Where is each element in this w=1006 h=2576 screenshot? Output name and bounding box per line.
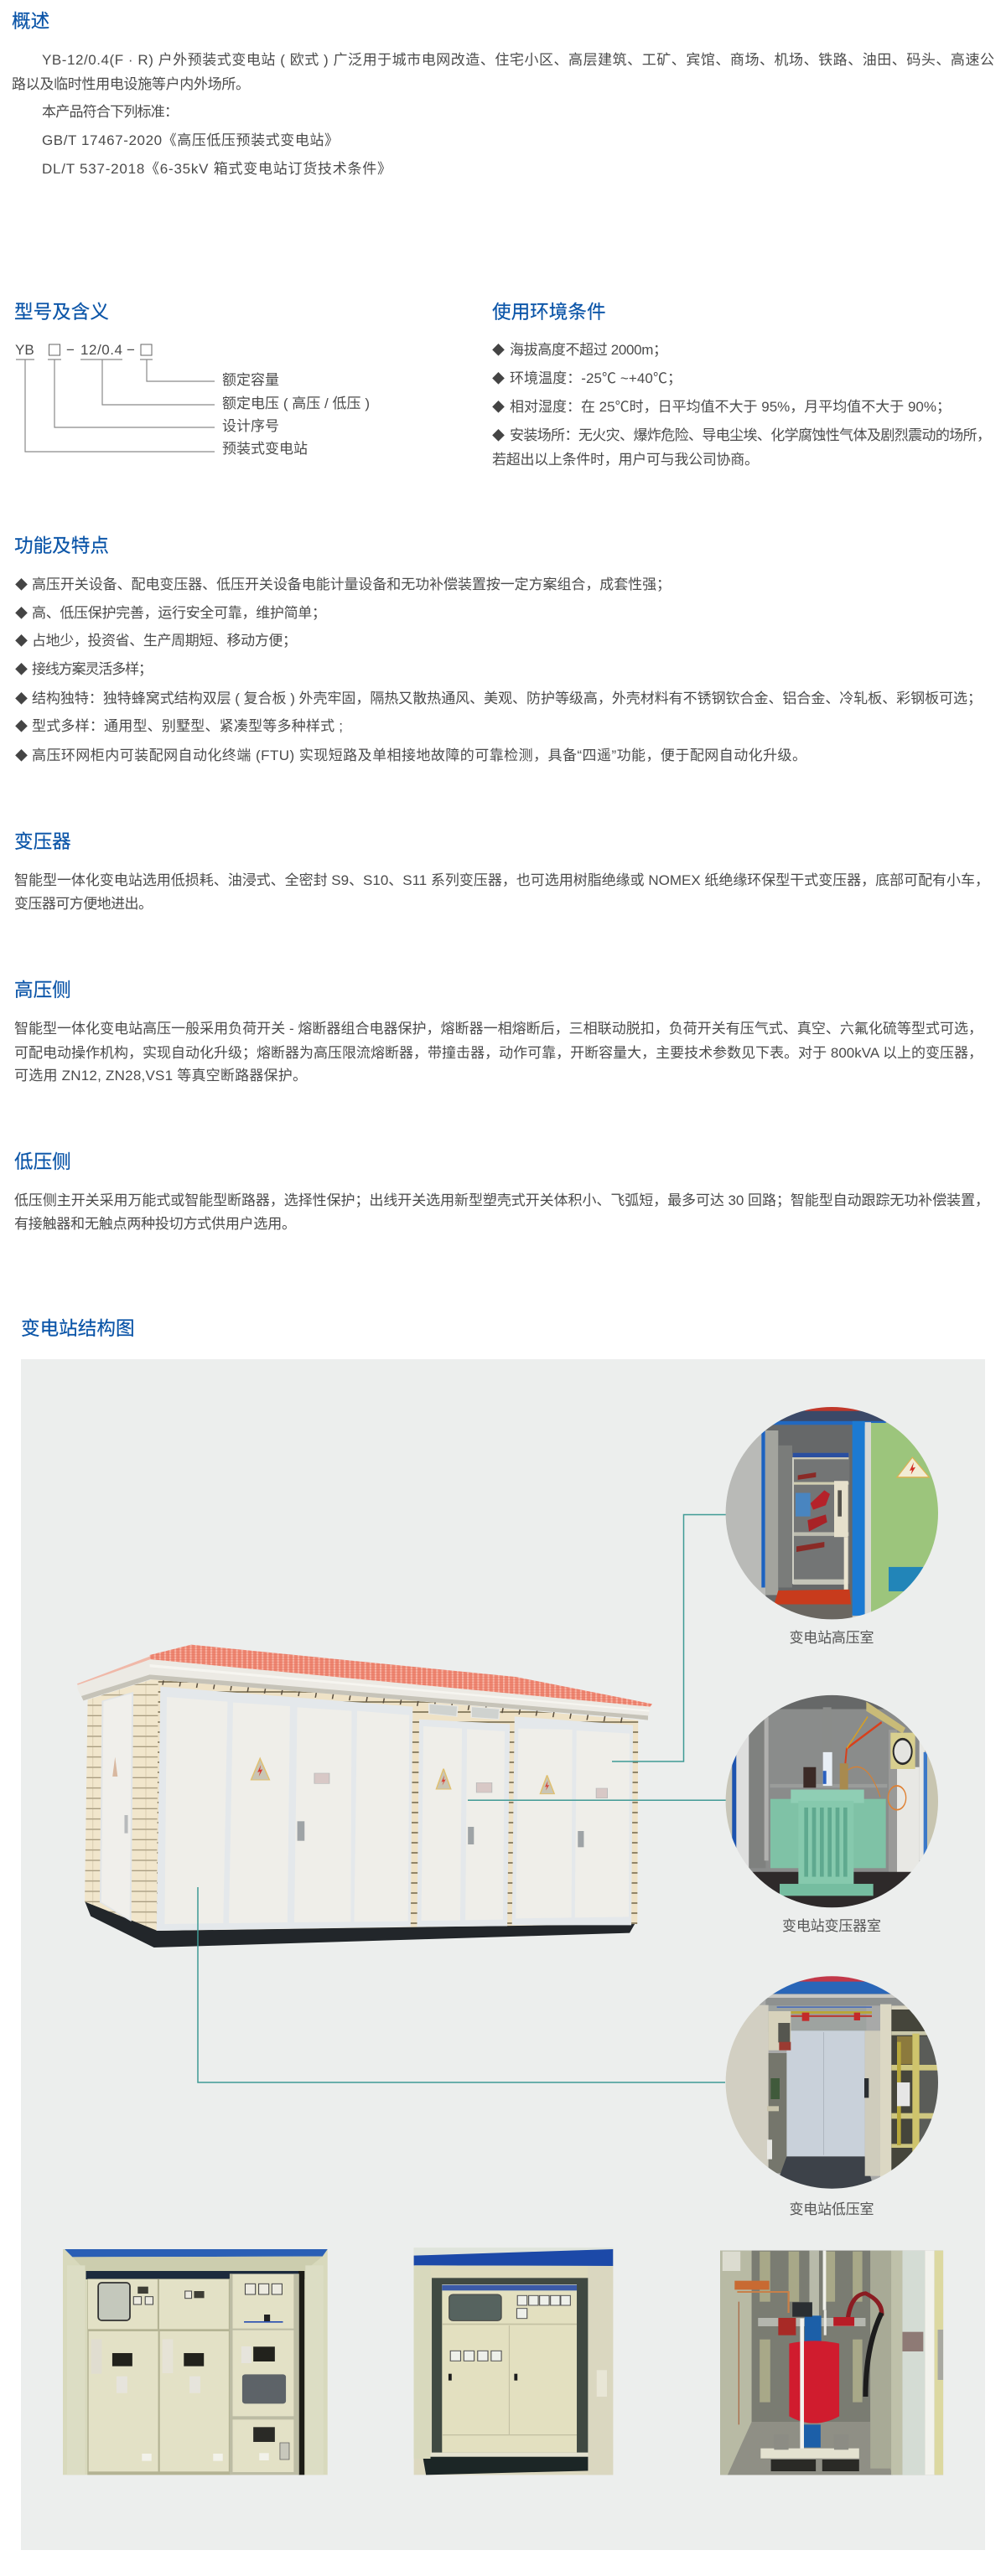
heading: low voltage side: 低压侧 [14, 1151, 71, 1172]
leader line: high voltage room [612, 1515, 726, 1761]
side door [101, 1693, 132, 1921]
transformer coil [805, 2315, 822, 2344]
label: rated capacity: 额定容量 [222, 372, 279, 388]
list: service conditions: ◆ [492, 344, 505, 358]
text block: transformer [14, 872, 989, 912]
list: functions and features: ◆ [15, 692, 28, 706]
list: service conditions: 若超出以上条件时，用户可与我公司协商。 [492, 452, 759, 468]
panel: structure diagram [21, 1359, 985, 2550]
list: functions and features: 结构独特：独特蜂窝式结构双层 ( 复合板 ) 外壳牢固，隔热又散热通风、美观、防护等级高，外壳材料有不锈钢钦合金、铝合金、冷轧板、彩钢板可选； [32, 691, 982, 706]
list: functions and features: ◆ [15, 634, 28, 649]
heading: substation structure diagram: 变电站结构图 [21, 1318, 135, 1339]
leader line: low voltage room [198, 1887, 725, 2082]
list: functions and features: 接线方案灵活多样； [32, 661, 153, 677]
model code: YB [15, 342, 34, 358]
list: functions and features: ◆ [15, 607, 28, 621]
label plates [314, 1773, 607, 1798]
list: service conditions: 环境温度：-25℃ ~+40℃； [510, 370, 682, 386]
list: functions and features: 型式多样：通用型、别墅型、紧凑型等多种样式 ; [32, 718, 343, 734]
text block: high voltage side [14, 1021, 983, 1084]
model code: − [127, 342, 135, 358]
heading: overview: 概述 [12, 11, 49, 32]
copper bus [737, 2292, 789, 2313]
front doors: section two [417, 1704, 510, 1927]
side wall [85, 1678, 158, 1931]
label: prefabricated substation: 预装式变电站 [222, 441, 308, 457]
text block: low voltage side: 低压侧主开关采用万能式或智能型断路器，选择性保护；出线开关选用新型塑壳式开关体积小、飞弧短，最多可达 30 回路；智能型自动跟踪无功补偿装置， [14, 1192, 989, 1208]
model code: 12/0.4 [80, 342, 122, 358]
text block: high voltage side: 智能型一体化变电站高压一般采用负荷开关 - 熔断器组合电器保护，熔断器一相熔断后，三相联动脱扣，负荷开关有压气式、真空、六氟化硫等型式可选， [14, 1021, 983, 1037]
text block: high voltage side: 可选用 ZN12, ZN28,VS1 等真空断路器保护。 [14, 1068, 307, 1084]
list: service conditions: ◆ [492, 372, 505, 386]
photo: low voltage cabinet [414, 2248, 613, 2475]
text block: high voltage side: 可配电动操作机构，实现自动化升级；熔断器为高压限流熔断器，带撞击器，动作可靠，开断容量大，主要技术参数见下表。对于 800kVA 以上的变压器， [14, 1045, 983, 1061]
text block: overview: DL/T 537-2018《6-35kV 箱式变电站订货技术条件》 [42, 161, 392, 177]
text block: overview: 路以及临时性用电设施等户内外场所。 [12, 76, 250, 92]
list: functions and features: ◆ [15, 749, 28, 763]
base [85, 1901, 636, 1948]
list: functions and features: 高压开关设备、配电变压器、低压开关设备电能计量设备和无功补偿装置按一定方案组合，成套性强； [32, 577, 671, 592]
photo: dry-type transformer [720, 2251, 943, 2475]
list: service conditions: 安装场所：无火灾、爆炸危险、导电尘埃、化学腐蚀性气体及剧烈震动的场所， [510, 427, 991, 443]
cornice [77, 1659, 651, 1720]
heading: model and meaning: 型号及含义 [14, 302, 109, 323]
text block: transformer: 智能型一体化变电站选用低损耗、油浸式、全密封 S9、S10、S11 系列变压器，也可选用树脂绝缘或 NOMEX 纸绝缘环保型干式变压器，底部可配有小车， [14, 872, 989, 888]
roof tiles [150, 1645, 652, 1707]
heading: functions and features: 功能及特点 [14, 535, 109, 556]
list: functions and features: 占地少，投资省、生产周期短、移动方便； [32, 633, 297, 649]
photo: switchgear cabinet [63, 2249, 328, 2475]
text block: low voltage side [14, 1192, 989, 1232]
cabinet panels [88, 2274, 293, 2472]
list: functions and features: ◆ [15, 663, 28, 677]
list: functions and features: 高压环网柜内可装配网自动化终端 (FTU) 实现短路及单相接地故障的可靠检测，具备“四遥”功能，便于配网自动化升级。 [32, 747, 806, 763]
label: design number: 设计序号 [222, 418, 279, 434]
model code [15, 342, 152, 358]
caption: low voltage room: 变电站低压室 [790, 2201, 874, 2217]
instrument window [449, 2294, 501, 2320]
caption: transformer room: 变电站变压器室 [782, 1918, 881, 1934]
photo circle: transformer room [723, 1692, 941, 1913]
text block: low voltage side: 有接触器和无触点两种投切方式供用户选用。 [14, 1216, 296, 1232]
list: functions and features: ◆ [15, 578, 28, 592]
window and instruments [98, 2283, 130, 2320]
front doors: section one [157, 1687, 412, 1931]
text block: transformer: 变压器可方便地进出。 [14, 896, 153, 912]
model code: − [66, 342, 75, 358]
list: functions and features [15, 577, 982, 763]
gauges [450, 2295, 570, 2361]
warning signs [251, 1758, 554, 1794]
list: service conditions: 相对湿度：在 25℃时，日平均值不大于 95%，月平均值不大于 90%； [510, 399, 951, 415]
door handles [298, 1821, 583, 1847]
heading: transformer: 变压器 [14, 831, 71, 852]
front doors: section three [512, 1716, 633, 1925]
text block: overview: YB-12/0.4(F · R) 户外预装式变电站 ( 欧式 ) 广泛用于城市电网改造、住宅小区、高层建筑、工矿、宾馆、商场、机场、铁路、油田、码头、高速公 [42, 52, 994, 68]
list: service conditions: ◆ [492, 429, 505, 443]
photo circle: high voltage room [723, 1404, 941, 1622]
caption: high voltage room: 变电站高压室 [790, 1630, 874, 1646]
heading: service conditions: 使用环境条件 [492, 302, 606, 323]
vents [760, 2252, 863, 2403]
label: rated voltage: 额定电压 ( 高压 / 低压 ) [222, 396, 370, 411]
heading: high voltage side: 高压侧 [14, 980, 71, 1001]
illustration: substation exterior [77, 1645, 652, 1948]
photo circle: low voltage room [723, 1975, 941, 2193]
list: service conditions [492, 342, 991, 468]
list: service conditions: ◆ [492, 401, 505, 415]
front wall [157, 1679, 638, 1931]
list: service conditions: 海拔高度不超过 2000m； [510, 342, 667, 358]
text block: overview [12, 52, 994, 177]
diagram: model code breakdown [15, 342, 370, 457]
text block: overview: 本产品符合下列标准： [42, 104, 179, 120]
list: functions and features: ◆ [15, 720, 28, 734]
cables [848, 2294, 882, 2319]
list: functions and features: 高、低压保护完善，运行安全可靠，维护简单； [32, 605, 326, 621]
text block: overview: GB/T 17467-2020《高压低压预装式变电站》 [42, 132, 339, 148]
leader line: transformer room [468, 1799, 726, 1801]
